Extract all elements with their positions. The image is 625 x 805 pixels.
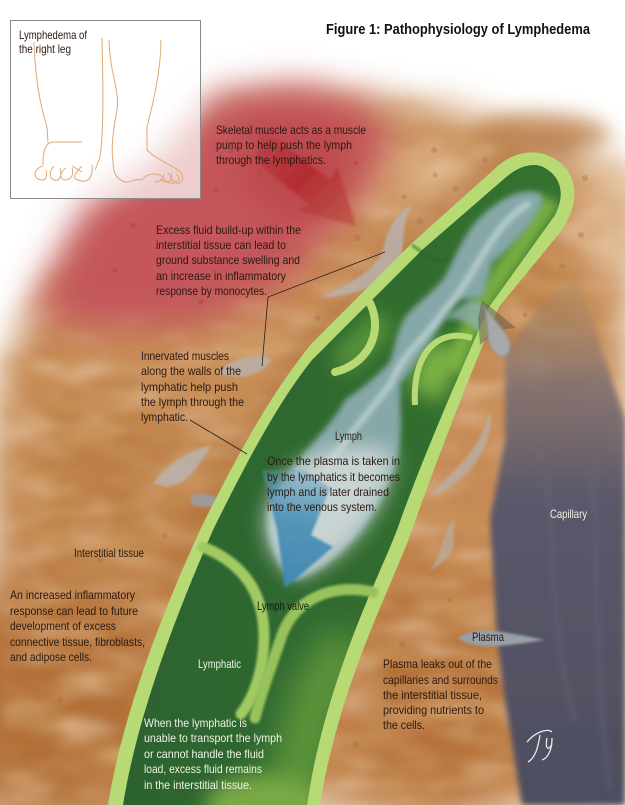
text: plasma leaks: Plasma leaks out of the <box>383 657 492 671</box>
text: innervated muscles: Innervated muscles <box>141 349 229 363</box>
capillary <box>490 277 625 805</box>
label: lymph valve: Lymph valve <box>257 599 309 613</box>
leader lines <box>190 252 385 454</box>
lymphatic vessel <box>108 152 574 805</box>
text: plasma taken in <box>267 454 400 514</box>
text: skeletal muscle: Skeletal muscle acts as a muscle <box>216 123 366 137</box>
text: inflammatory response: response can lead to future <box>10 604 138 618</box>
wall folds <box>412 245 450 261</box>
dark halo around lymphatic <box>170 145 575 590</box>
skeletal muscle region <box>35 85 395 330</box>
text: inflammatory response: connective tissue, fibroblasts, <box>10 635 145 649</box>
text: skeletal muscle: pump to help push the lymph <box>216 138 352 152</box>
lower valve right <box>255 590 373 718</box>
text: inflammatory response: and adipose cells. <box>10 650 92 664</box>
text: excess fluid: an increase in inflammatory <box>156 269 286 283</box>
text: plasma taken in: lymph and is later drained <box>267 485 389 499</box>
text: excess fluid: ground substance swelling and <box>156 253 300 267</box>
plasma blobs <box>153 205 545 646</box>
text: inflammatory response <box>10 588 145 664</box>
arrow: plasma leak from capillary <box>478 300 516 356</box>
inset caption: Lymphedema of <box>19 28 88 42</box>
valve upper right <box>415 336 472 405</box>
text: innervated muscles: along the walls of the <box>141 364 241 378</box>
label: capillary: Capillary <box>550 507 587 521</box>
text: inflammatory response: An increased inflammatory <box>10 588 135 602</box>
text: plasma leaks: providing nutrients to <box>383 703 484 717</box>
text: plasma leaks: capillaries and surrounds <box>383 673 498 687</box>
text: innervated muscles <box>141 349 244 424</box>
icon: artist signature <box>527 730 552 762</box>
text: lymphatic failure: in the interstitial tissue. <box>144 778 252 792</box>
inset caption <box>19 28 88 56</box>
icon: feet outlines <box>34 38 183 183</box>
lower valve left <box>203 547 264 714</box>
label: interstitial tissue: Interstitial tissue <box>74 546 144 560</box>
lymph fluid <box>265 191 542 580</box>
text: innervated muscles: lymphatic help push <box>141 380 238 394</box>
arrow: skeletal muscle pump <box>255 128 356 226</box>
inset: leg illustration <box>10 20 200 198</box>
text: innervated muscles: the lymph through the <box>141 395 244 409</box>
label: plasma: Plasma <box>472 630 504 644</box>
tissue cells dots <box>57 147 588 748</box>
text: excess fluid: interstitial tissue can lead to <box>156 238 286 252</box>
text: inflammatory response: development of excess <box>10 619 116 633</box>
text: excess fluid: Excess fluid build-up within the <box>156 223 301 237</box>
text: plasma taken in: by the lymphatics it becomes <box>267 470 400 484</box>
text: excess fluid <box>156 223 301 298</box>
text: lymphatic failure: load, excess fluid remains <box>144 762 262 776</box>
text: lymphatic failure <box>144 716 282 792</box>
text: plasma taken in: Once the plasma is taken in <box>267 454 400 468</box>
text: plasma leaks: the cells. <box>383 718 425 732</box>
text: excess fluid: response by monocytes. <box>156 284 267 298</box>
valve upper left <box>335 303 375 372</box>
title: Figure 1: Pathophysiology of Lymphedema <box>326 21 591 38</box>
text: skeletal muscle: through the lymphatics. <box>216 153 326 167</box>
label: lymph: Lymph <box>335 429 362 443</box>
label: lymphatic: Lymphatic <box>198 657 241 671</box>
text: lymphatic failure: or cannot handle the fluid <box>144 747 264 761</box>
interior shading <box>205 200 552 805</box>
text: skeletal muscle <box>216 123 366 167</box>
vessel wall <box>108 152 574 805</box>
text: plasma leaks <box>383 657 498 732</box>
text: innervated muscles: lymphatic. <box>141 410 188 424</box>
vessel interior <box>123 165 561 805</box>
text: lymphatic failure: When the lymphatic is <box>144 716 247 730</box>
arrow: lymph flow <box>262 470 333 588</box>
text: plasma leaks: the interstitial tissue, <box>383 688 482 702</box>
text: lymphatic failure: unable to transport the lymph <box>144 731 282 745</box>
text: plasma taken in: into the venous system. <box>267 500 377 514</box>
inset caption: the right leg <box>19 42 71 56</box>
